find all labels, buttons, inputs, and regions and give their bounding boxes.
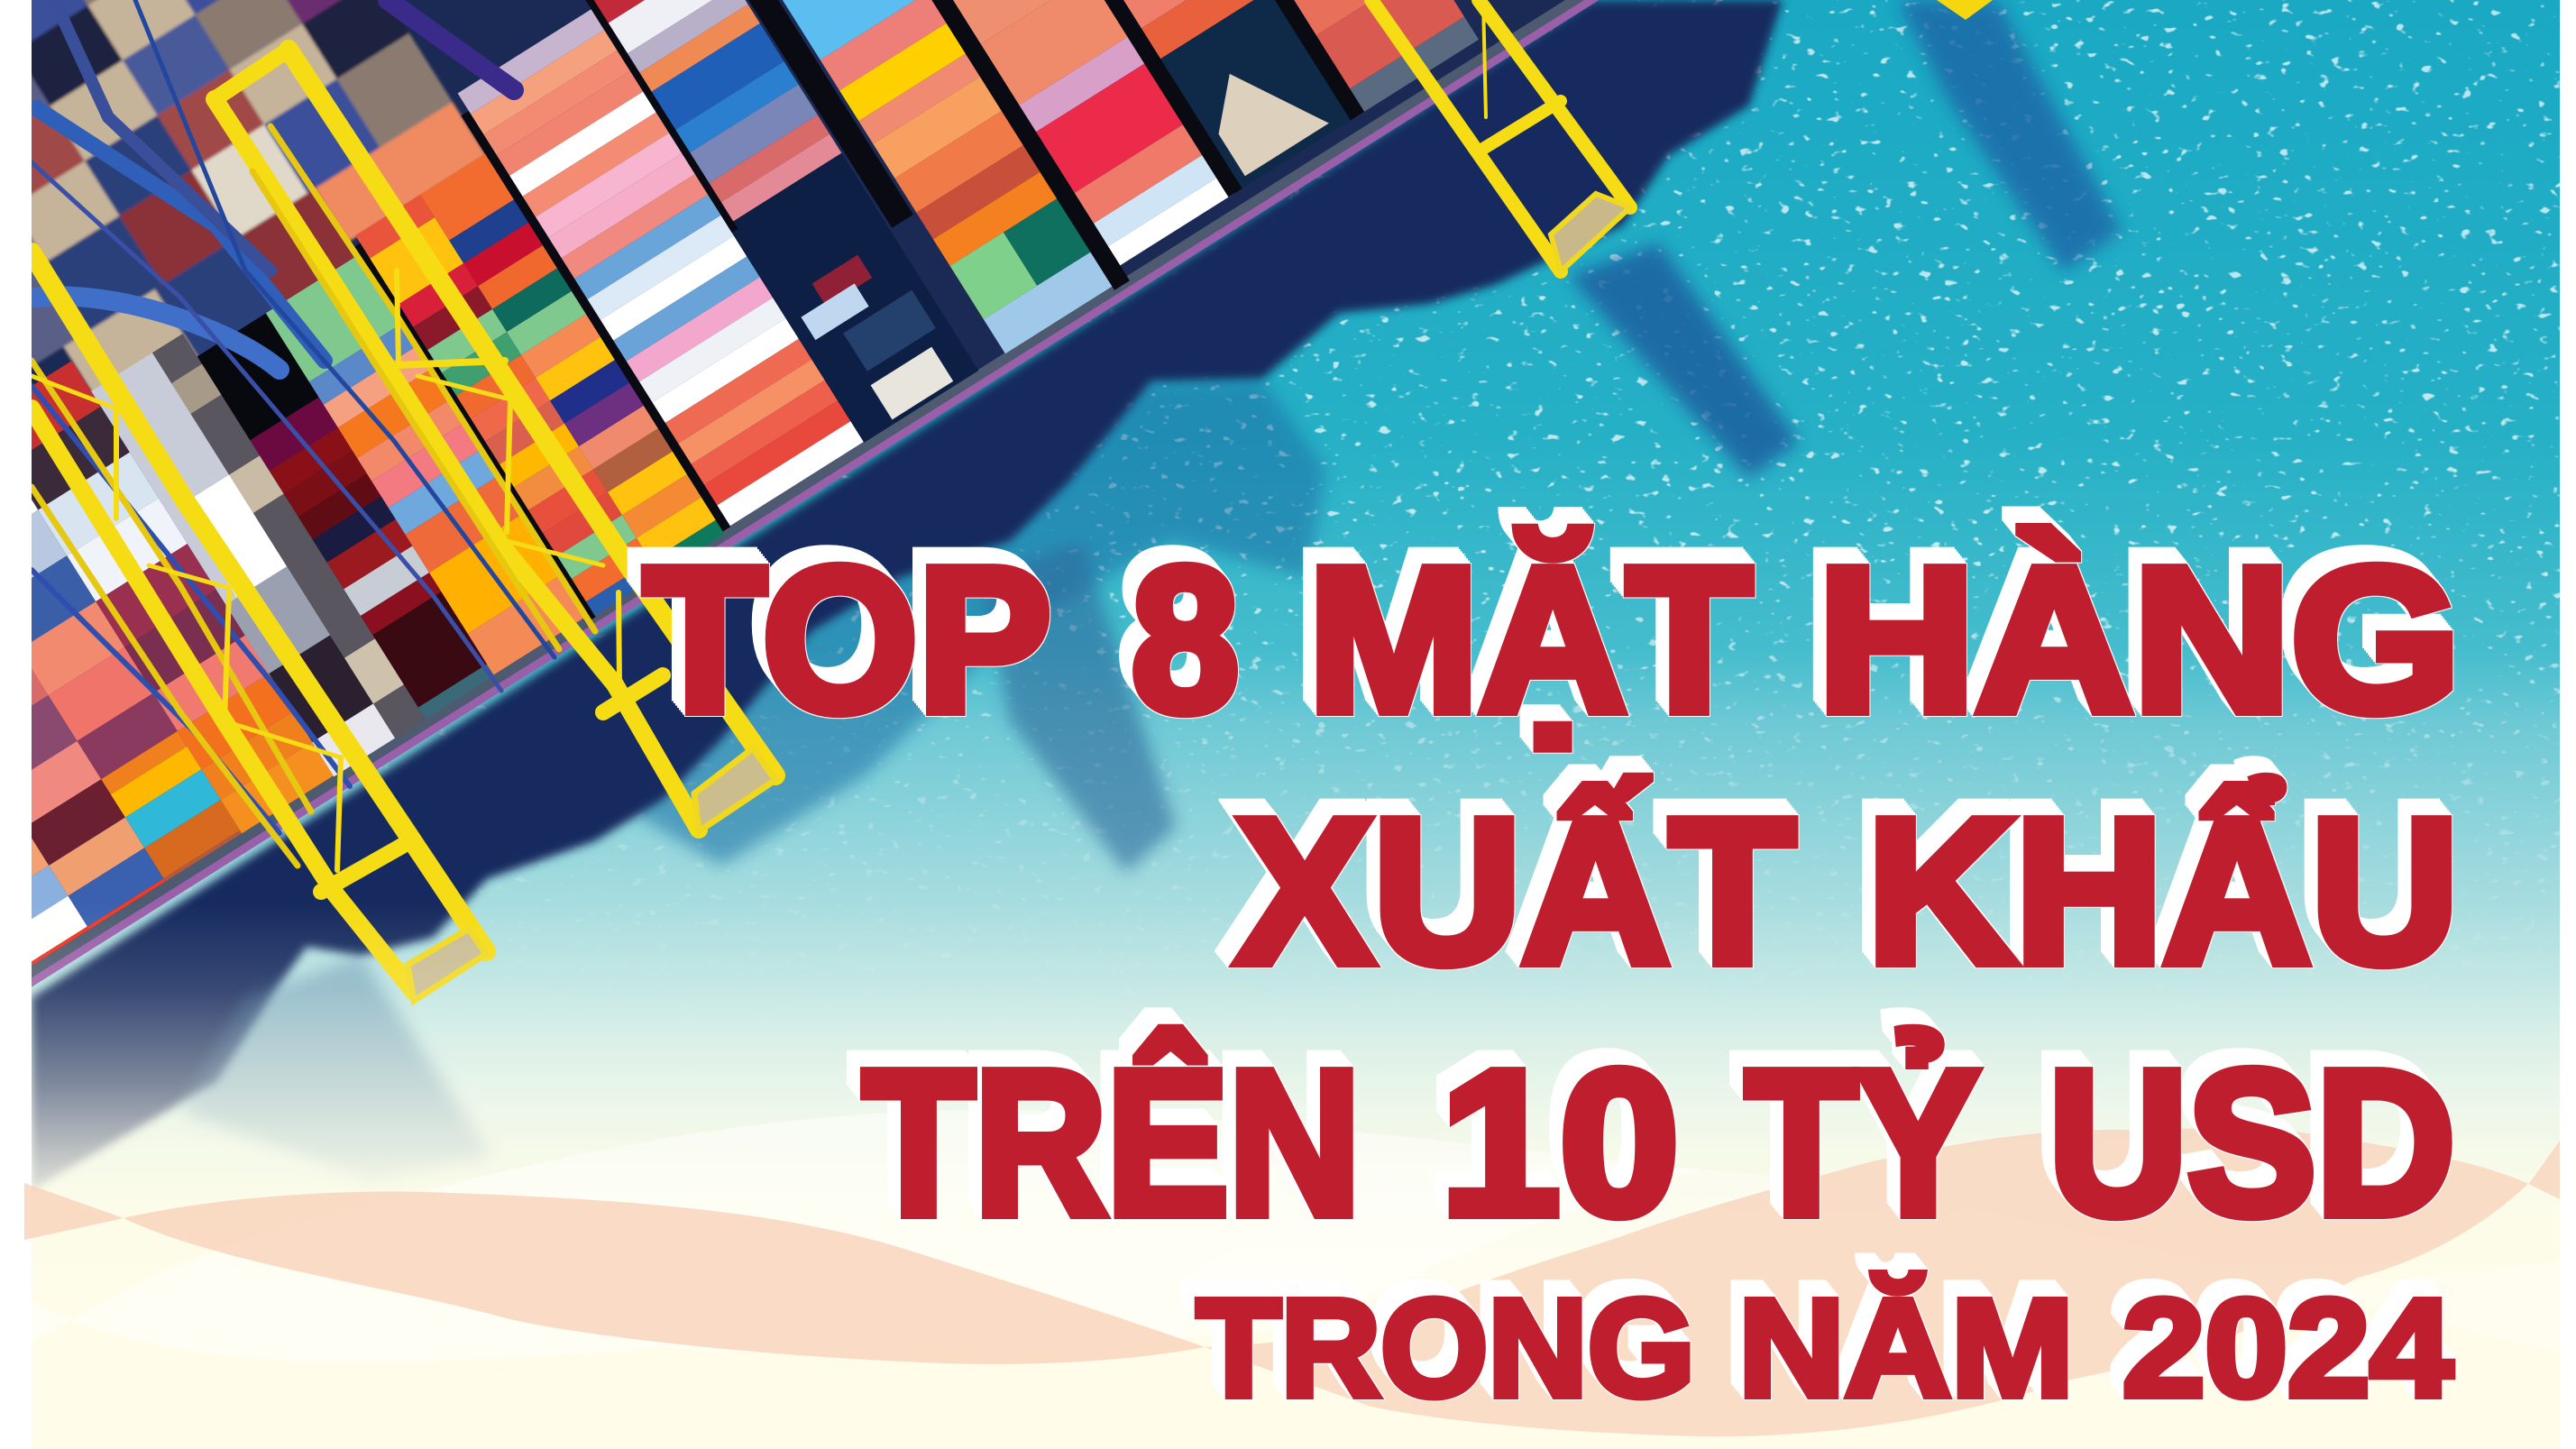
yellow crane left: [32, 252, 486, 1001]
container bay E with beige hatch: [1016, 0, 1357, 188]
title line 3: 10: [1441, 1029, 1679, 1258]
container bay D: [866, 0, 1234, 265]
title line 3: TỶ: [1746, 1029, 1979, 1258]
container bay F: [1090, 0, 1479, 112]
foot of left crane: [408, 929, 486, 1001]
grey hatch and mottled columns: [91, 334, 426, 776]
container bay B with open hatch below: [545, 0, 978, 443]
foot of right crane: [1551, 194, 1630, 271]
blue crane structure, upper left: [32, 0, 555, 833]
pale wave right: [1172, 1166, 2560, 1353]
container bay left of A, two columns: [355, 154, 724, 616]
pale wave: [32, 1110, 1701, 1361]
water sparkles: [184, 0, 2560, 934]
peach wave left: [24, 1183, 1205, 1364]
small yellow crane tip at top edge: [1937, 0, 1993, 20]
title line 3: TRÊN: [863, 1029, 1361, 1258]
title line 1: HÀNG: [1818, 526, 2461, 755]
title line 4: 2024: [2122, 1270, 2452, 1426]
container bay C: [743, 0, 1116, 353]
yellow crane right: [1371, 0, 1630, 271]
title line 2: [1236, 777, 2459, 1006]
title line 2: XUẤT: [1236, 777, 1795, 1006]
black gaps between bays: [208, 0, 1374, 622]
title line 3: USD: [2049, 1029, 2455, 1258]
yellow crane centre: [215, 50, 775, 831]
title line 4: TRONG: [1196, 1270, 1695, 1426]
dock clutter behind cranes, upper left: [32, 0, 487, 415]
title line 1: MẶT: [1308, 526, 1752, 755]
ship hull and deck: [32, 0, 1600, 987]
title line 3: [863, 1029, 2455, 1258]
sea water: [32, 0, 2560, 1163]
title line 4: [1196, 1270, 2452, 1426]
title line 4: NĂM: [1738, 1270, 2074, 1426]
crane and ship shadows on water: [32, 0, 2122, 1190]
title line 1: 8: [1132, 526, 1239, 755]
title: [644, 526, 2461, 1426]
title line 1: [644, 526, 2461, 755]
title line 2: KHẨU: [1867, 777, 2459, 1006]
fade of photo into cream: [32, 902, 2560, 1449]
container bay: black hatch and dark reds: [197, 313, 494, 719]
decorative waves: [24, 1110, 2560, 1436]
peach wave right: [1205, 1128, 2560, 1436]
container bay A: [458, 9, 864, 526]
title line 1: TOP: [644, 526, 1051, 755]
foot of centre crane: [694, 748, 775, 831]
container bay: salmon, orange and yellow column: [266, 255, 585, 674]
container bay lower left, four columns: [0, 361, 334, 977]
